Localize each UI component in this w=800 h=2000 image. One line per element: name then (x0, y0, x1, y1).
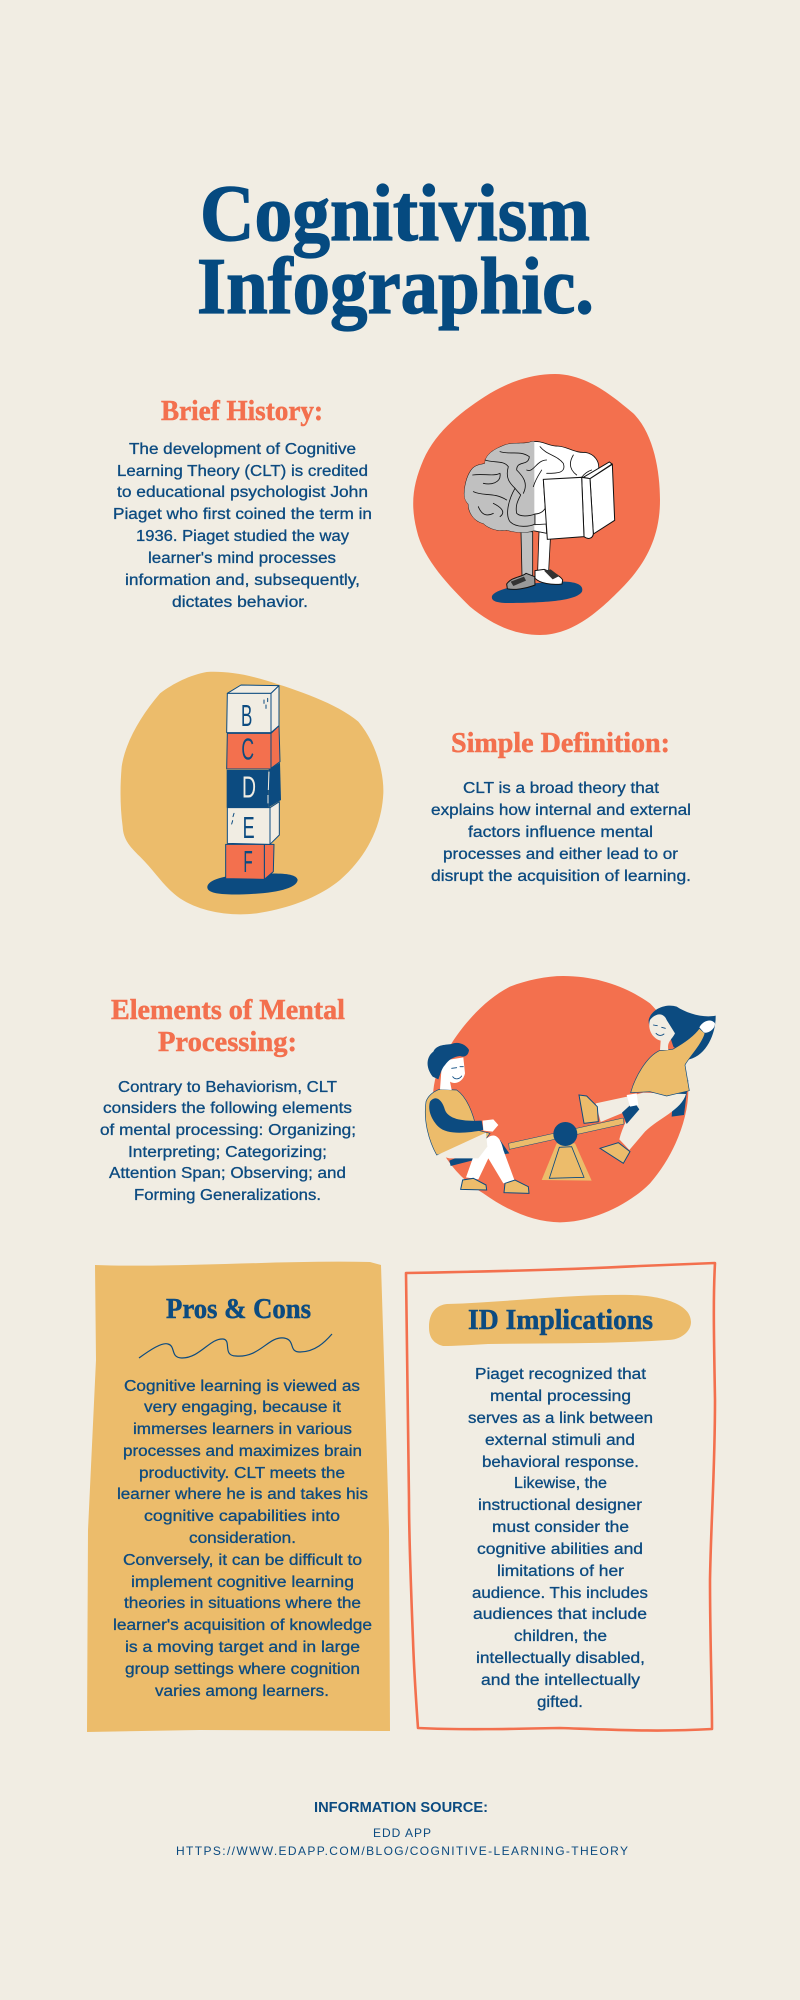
text block: pros and cons (113, 1378, 372, 1700)
block D: D (242, 770, 256, 804)
icon: children on a seesaw on orange blob (425, 976, 716, 1222)
heading: brief history: Brief History: (161, 396, 323, 427)
text block: id implications: must consider the (492, 1519, 629, 1536)
brain (464, 441, 599, 533)
text block: elements of mental processing: Attention Span; Observing; and (109, 1165, 346, 1182)
seesaw pivot (553, 1122, 577, 1146)
orange hand-drawn frame (406, 1263, 715, 1731)
text block: id implications: serves as a link between (468, 1410, 653, 1427)
title: Cognitivism (200, 168, 590, 258)
yellow blob (121, 672, 383, 914)
text block: elements of mental processing: of mental processing: Organizing; (100, 1122, 356, 1139)
text block: id implications: external stimuli and (485, 1432, 635, 1449)
block F (226, 844, 274, 879)
text block: simple definition: processes and either lead to or (443, 846, 678, 863)
text block: id implications: instructional designer (478, 1497, 642, 1514)
heading: pros and cons: Pros & Cons (166, 1294, 311, 1325)
heading: simple definition: Simple Definition: (451, 728, 670, 759)
text block: pros and cons: productivity. CLT meets the (139, 1465, 345, 1482)
text block: brief history: learner's mind processes (148, 550, 336, 567)
shoes (507, 573, 535, 589)
girl trousers (596, 1093, 650, 1122)
arm and hand (508, 488, 535, 526)
boy torso (425, 1089, 490, 1155)
heading: elements of mental processing (111, 995, 345, 1058)
text block: elements of mental processing: considers the following elements (103, 1100, 352, 1117)
text block: elements of mental processing: Forming Generalizations. (134, 1187, 321, 1204)
source url: HTTPS://WWW.EDAPP.COM/BLOG/COGNITIVE-LEARNING-THEORY (176, 1844, 628, 1858)
text block: simple definition: CLT is a broad theory that (463, 780, 660, 797)
text block: simple definition (431, 780, 691, 885)
girl head (649, 1014, 675, 1050)
block B: B (241, 699, 252, 733)
seesaw base (542, 1143, 592, 1181)
text block: id implications: behavioral response. (482, 1454, 639, 1471)
heading: elements of mental processing: Elements of Mental (111, 995, 345, 1026)
text block: pros and cons: theories in situations where the (124, 1595, 361, 1612)
title (197, 168, 594, 331)
text block: pros and cons: group settings where cognition (125, 1661, 360, 1678)
text block: pros and cons: consideration. (189, 1530, 296, 1547)
text block: elements of mental processing: Interpreting; Categorizing; (128, 1144, 327, 1161)
block E (227, 802, 279, 845)
block B (227, 685, 279, 733)
orange blob (433, 976, 688, 1222)
boy head (440, 1057, 465, 1090)
text block: brief history: 1936. Piaget studied the way (136, 528, 349, 545)
source name: EDD APP (373, 1826, 431, 1840)
icon: letter block tower on yellow blob (121, 672, 383, 914)
floor shadow (492, 582, 582, 603)
heading: elements of mental processing: Processing: (158, 1027, 297, 1058)
text block: elements of mental processing (100, 1079, 356, 1204)
text block: pros and cons: cognitive capabilities into (144, 1508, 340, 1525)
text block: brief history (113, 441, 372, 611)
block F: F (243, 845, 253, 879)
text block: id implications: Likewise, the (514, 1475, 607, 1492)
text block: brief history: information and, subsequently, (125, 572, 360, 589)
text block: pros and cons: very engaging, because it (144, 1399, 342, 1416)
text block: brief history: The development of Cognitive (129, 441, 356, 458)
text block: brief history: to educational psychologist John (117, 484, 368, 501)
text block: brief history: dictates behavior. (172, 594, 308, 611)
girl hair (649, 1006, 716, 1059)
boy legs (466, 1136, 515, 1183)
block D (227, 763, 281, 808)
orange blob (413, 374, 660, 635)
text block: id implications: Piaget recognized that (475, 1366, 647, 1383)
squiggle underline (139, 1334, 332, 1358)
text block: elements of mental processing: Contrary to Behaviorism, CLT (118, 1079, 338, 1096)
text block: id implications: intellectually disabled, (476, 1650, 645, 1667)
girl (579, 1006, 716, 1163)
source heading: INFORMATION SOURCE: (314, 1800, 488, 1816)
panel background (87, 1262, 390, 1732)
girl shoes (579, 1095, 598, 1123)
text block: pros and cons: learner where he is and takes his (117, 1486, 368, 1503)
text block: id implications: children, the (514, 1628, 607, 1645)
text block: id implications: cognitive abilities and (477, 1541, 643, 1558)
text block: id implications: audiences that include (473, 1606, 647, 1623)
girl sweater and arm (631, 1028, 705, 1096)
legs (521, 532, 533, 576)
text block: id implications (468, 1366, 653, 1711)
text block: id implications: and the intellectually (481, 1672, 640, 1689)
floor shadow (207, 873, 298, 894)
text block: pros and cons: learner's acquisition of knowledge (113, 1617, 372, 1634)
heading pill (429, 1295, 691, 1346)
panel: pros and cons (87, 1262, 390, 1732)
title: Infographic. (197, 241, 594, 331)
open book (583, 462, 612, 479)
seesaw plank (509, 1118, 624, 1149)
boy (425, 1043, 529, 1193)
text block: id implications: audience. This includes (472, 1585, 648, 1602)
footer: information source (176, 1800, 628, 1858)
text block: simple definition: factors influence mental (468, 824, 653, 841)
text block: brief history: Piaget who first coined the term in (113, 506, 372, 523)
heading: id implications: ID Implications (468, 1305, 653, 1336)
text block: brief history: Learning Theory (CLT) is credited (117, 463, 368, 480)
text block: pros and cons: processes and maximizes brain (123, 1443, 362, 1460)
block C: C (241, 732, 254, 766)
boy shoes (461, 1178, 487, 1190)
text block: pros and cons: implement cognitive learning (131, 1574, 354, 1591)
block E: E (243, 811, 255, 845)
text block: id implications: gifted. (537, 1694, 583, 1711)
icon: brain reading a book on orange blob (413, 374, 660, 635)
block C (227, 726, 280, 769)
text block: pros and cons: is a moving target and in large (125, 1639, 360, 1656)
text block: pros and cons: Cognitive learning is viewed as (124, 1378, 360, 1395)
text block: id implications: mental processing (490, 1388, 631, 1405)
boy sleeve (429, 1098, 483, 1133)
text block: pros and cons: varies among learners. (155, 1683, 329, 1700)
text block: simple definition: disrupt the acquisition of learning. (431, 868, 691, 885)
text block: id implications: limitations of her (497, 1563, 624, 1580)
text block: pros and cons: Conversely, it can be difficult to (123, 1552, 362, 1569)
text block: simple definition: explains how internal and external (431, 802, 691, 819)
panel: id implications (406, 1263, 715, 1731)
text block: pros and cons: immerses learners in various (133, 1421, 352, 1438)
